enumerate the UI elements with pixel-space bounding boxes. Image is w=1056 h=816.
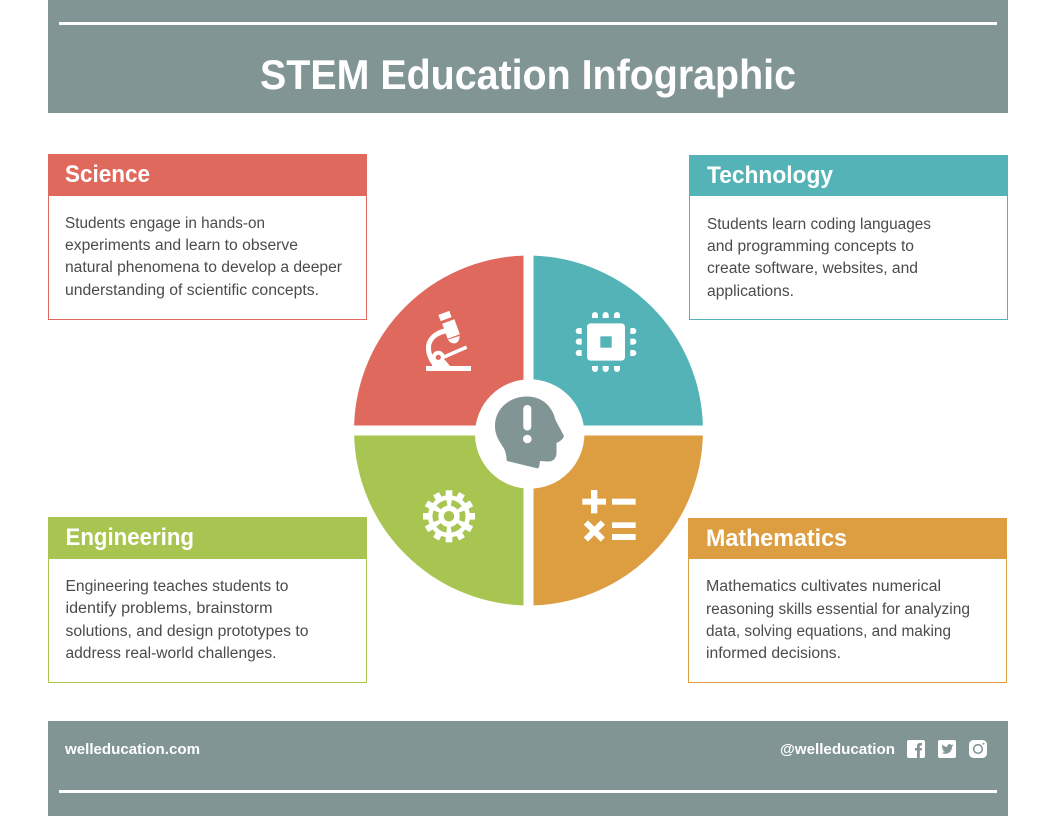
footer banner	[48, 721, 1008, 816]
center circle	[475, 379, 584, 489]
header banner	[48, 0, 1008, 113]
heading: engineering: Engineering	[66, 524, 194, 551]
text: science description: understanding of scientific concepts.	[65, 282, 319, 299]
footer social handle: @welleducation	[780, 741, 895, 758]
icon: instagram	[969, 740, 987, 758]
chart: STEM circle	[354, 256, 703, 605]
text: mathematics description	[706, 578, 970, 662]
footer website: welleducation.com	[64, 741, 200, 758]
text: engineering description: Engineering teaches students to	[66, 578, 288, 595]
text: technology description: and programming concepts to	[707, 238, 914, 255]
heading: technology: Technology	[707, 162, 834, 189]
text: technology description	[707, 216, 931, 300]
text: engineering description: address real-world challenges.	[66, 645, 276, 662]
icon: twitter	[938, 740, 956, 758]
icon: chip	[576, 312, 636, 372]
heading: science: Science	[65, 161, 150, 188]
heading: mathematics: Mathematics	[706, 525, 847, 552]
icon: head with exclamation	[495, 396, 564, 468]
text: engineering description: solutions, and design prototypes to	[66, 623, 308, 640]
icon: facebook	[907, 740, 925, 758]
text: engineering description: identify problems, brainstorm	[66, 600, 272, 617]
panel: engineering	[48, 517, 367, 682]
icon: gear	[423, 490, 475, 542]
panel: technology	[689, 155, 1008, 320]
panel: science	[48, 154, 367, 320]
text: technology description: applications.	[707, 283, 794, 300]
text: mathematics description: reasoning skills essential for analyzing	[706, 601, 970, 618]
title: STEM Education Infographic	[260, 51, 796, 98]
icon: math symbols	[582, 490, 636, 542]
text: mathematics description: informed decisions.	[706, 645, 841, 662]
segment: mathematics	[534, 436, 703, 605]
text: science description: Students engage in hands-on	[65, 215, 265, 232]
text: science description	[65, 215, 342, 299]
segment: science	[354, 256, 524, 426]
text: technology description: create software, websites, and	[707, 260, 918, 277]
text: mathematics description: data, solving equations, and making	[706, 623, 951, 640]
text: mathematics description: Mathematics cultivates numerical	[706, 578, 941, 595]
panel: mathematics	[688, 518, 1007, 682]
segment: technology	[534, 256, 703, 426]
text: technology description: Students learn coding languages	[707, 216, 931, 233]
segment: engineering	[354, 436, 524, 605]
icon: microscope	[426, 311, 471, 371]
text: science description: natural phenomena to develop a deeper	[65, 259, 342, 276]
text: engineering description	[66, 578, 308, 662]
text: science description: experiments and learn to observe	[65, 237, 298, 254]
